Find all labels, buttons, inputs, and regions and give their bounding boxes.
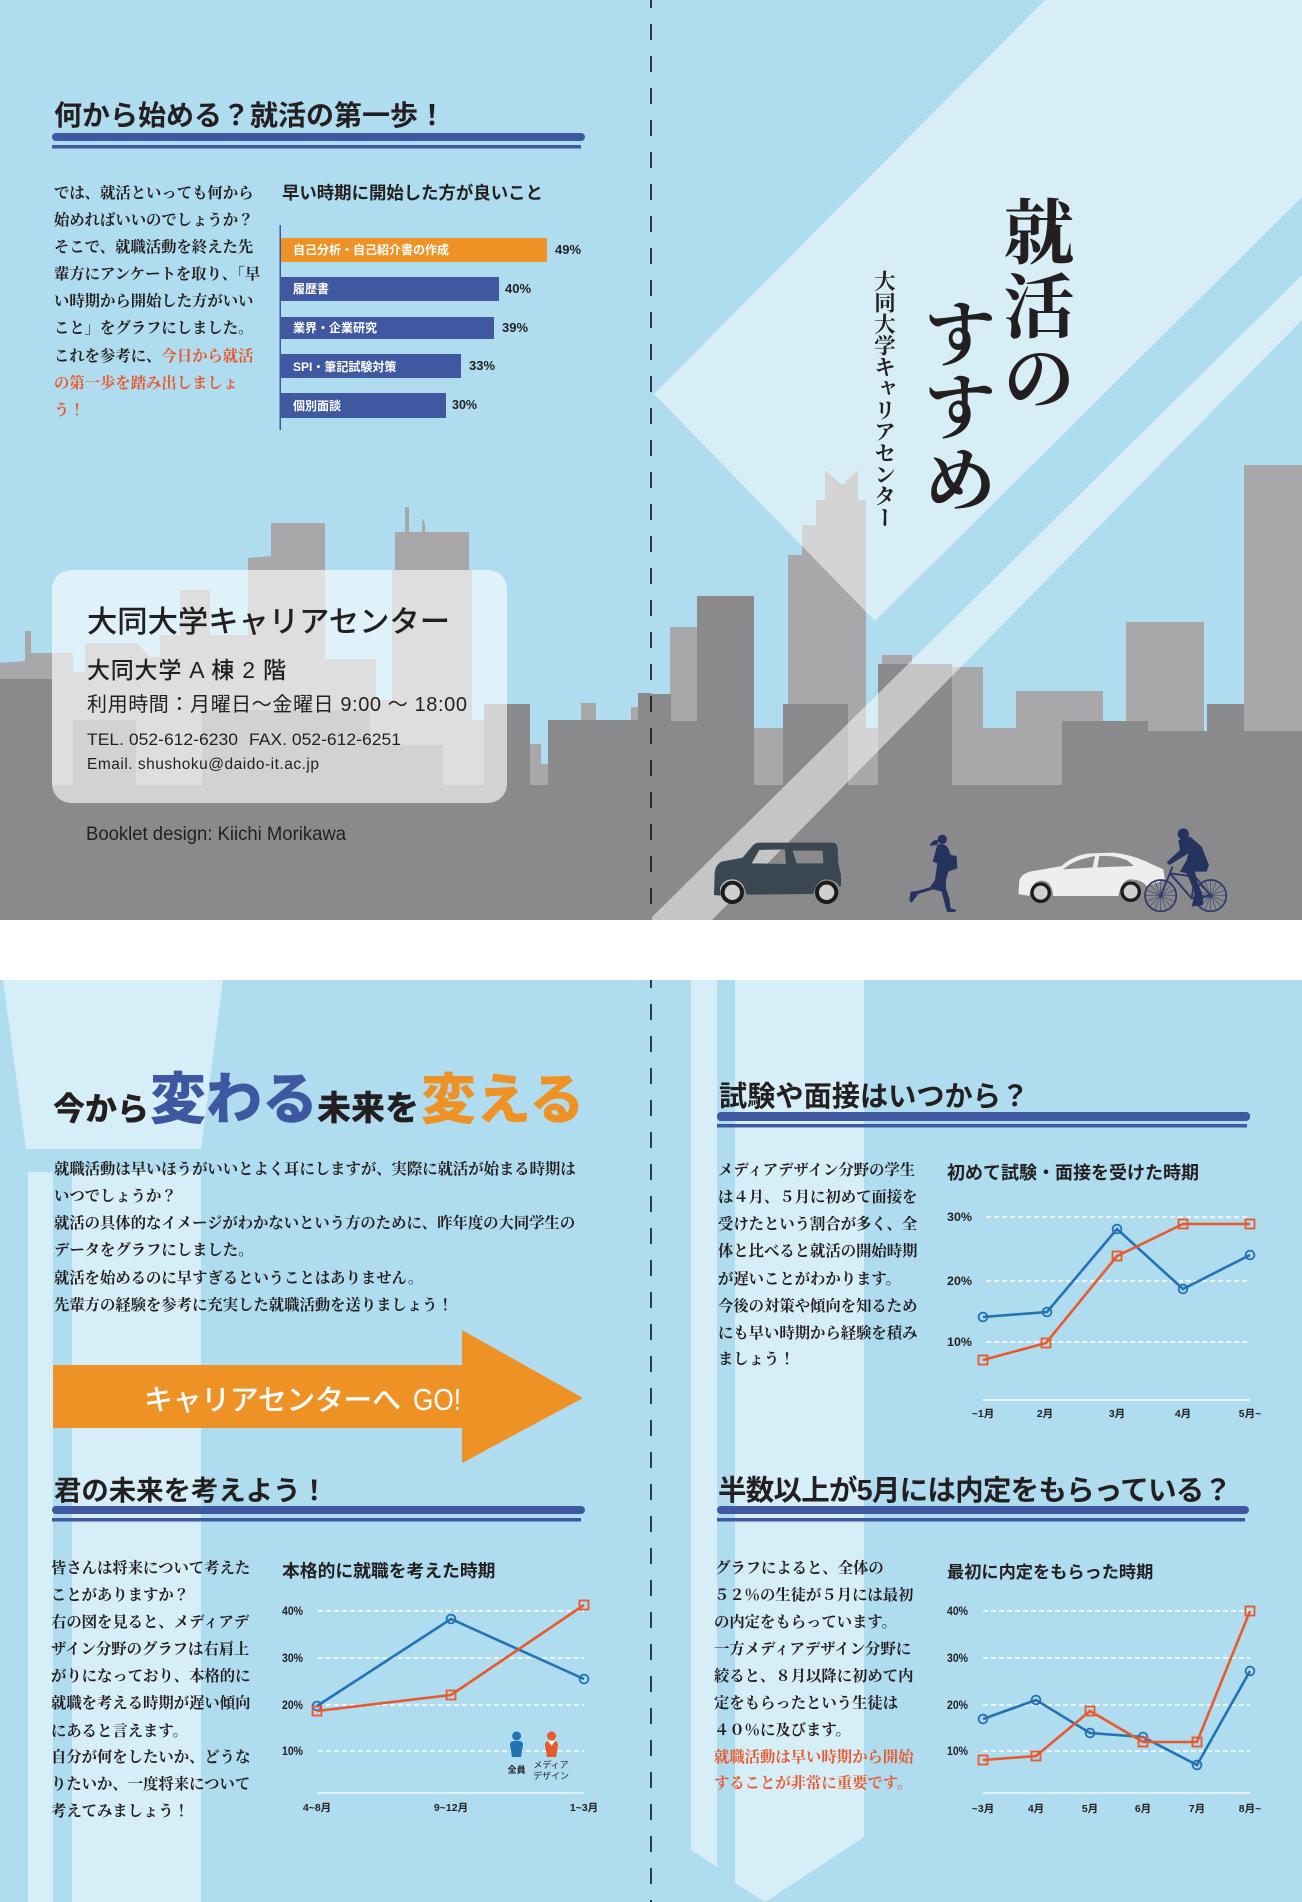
- line chart: first job offer: 8月~: [1239, 1803, 1261, 1815]
- text block: your future: ことがありますか？: [51, 1586, 189, 1604]
- text block: exams and interviews: メディアデザイン分野の学生: [718, 1161, 915, 1179]
- text block: job offers: ５２％の生徒が５月には最初: [714, 1585, 913, 1604]
- bar: SPI 33%: 33%: [469, 358, 495, 373]
- legend: media design: デザイン: [533, 1770, 569, 1781]
- text block: your future: 自分が何をしたいか、どうな: [51, 1747, 250, 1766]
- icon: white car: [1018, 853, 1165, 901]
- series: media design: [978, 1606, 1254, 1764]
- text block: first step intro: [54, 183, 260, 419]
- text block: your future: 就職を考える時期が遅い傾向: [51, 1693, 250, 1712]
- text block: intro: 就職活動は早いほうがいいとよく耳にしますが、実際に就活が始まる時期は: [54, 1159, 576, 1178]
- text block: exams and interviews: 受けたという割合が多く、全: [718, 1214, 918, 1233]
- text block: first step intro: の第一歩を踏み出しましょ: [54, 373, 238, 392]
- text block: exams and interviews: にも早い時期から経験を積み: [718, 1323, 917, 1342]
- cover title: 就: [1003, 177, 1075, 279]
- legend: all students: [508, 1732, 526, 1775]
- fold line: lower spread: [650, 980, 652, 1902]
- line chart: when students began considering jobs: 9~12月: [434, 1802, 468, 1814]
- cover title: 活: [1003, 251, 1075, 353]
- text block: your future: [51, 1558, 250, 1820]
- line chart: first exam or interview: ~1月: [972, 1408, 994, 1420]
- cover title: [924, 177, 1075, 527]
- line chart: first job offer: 6月: [1135, 1803, 1151, 1815]
- text block: your future: 右の図を見ると、メディアデ: [51, 1613, 250, 1631]
- text block: exams and interviews: ましょう！: [718, 1350, 795, 1368]
- cover title: す: [924, 279, 996, 381]
- line chart: when students began considering jobs: 40%: [282, 1606, 303, 1618]
- line chart: first job offer: 4月: [1028, 1803, 1044, 1815]
- text block: first step intro: 輩方にアンケートを取り、「早: [54, 264, 260, 283]
- headline: 変える: [421, 1069, 584, 1131]
- line chart: first exam or interview: 5月~: [1239, 1408, 1261, 1420]
- chart title: 最初に内定をもらった時期: [947, 1562, 1153, 1582]
- text block: intro: いつでしょうか？: [54, 1187, 177, 1205]
- text block: job offers: グラフによると、全体の: [715, 1559, 884, 1577]
- cover title: め: [924, 425, 996, 527]
- text block: first step intro: これを参考に、今日から就活: [54, 346, 253, 365]
- text block: intro: 先輩方の経験を参考に充実した就職活動を送りましょう！: [54, 1295, 453, 1314]
- text block: job offers: 定をもらったという生徒は: [714, 1693, 898, 1712]
- line chart: when students began considering jobs: [282, 1561, 598, 1814]
- line chart: first job offer: 5月: [1082, 1803, 1098, 1815]
- text block: your future: りたいか、一度将来について: [51, 1774, 250, 1793]
- text block: intro: 就活を始めるのに早すぎるということはありません。: [54, 1268, 423, 1287]
- contact: building: 大同大学 A 棟 2 階: [87, 657, 286, 683]
- heading: exams and interviews: [717, 1080, 1250, 1128]
- arrow: to career center: [53, 1330, 583, 1463]
- legend: all students: 全員: [508, 1764, 526, 1775]
- text block: job offers: [714, 1559, 915, 1792]
- heading: your future: [52, 1475, 585, 1522]
- text block: exams and interviews: 体と比べると就活の開始時期: [718, 1241, 917, 1260]
- cover title: す: [924, 352, 996, 454]
- bar: resume 40%: 履歴書: [293, 281, 329, 296]
- line chart: first job offer: 7月: [1189, 1803, 1205, 1815]
- line chart: first job offer: 30%: [947, 1653, 968, 1665]
- line chart: first exam or interview: 4月: [1175, 1408, 1191, 1420]
- bar: interview 30%: [281, 393, 477, 418]
- line chart: first exam or interview: 2月: [1037, 1408, 1053, 1420]
- line chart: first job offer: ~3月: [972, 1803, 994, 1815]
- line chart: when students began considering jobs: 20%: [282, 1700, 303, 1712]
- contact: hours: 利用時間：月曜日～金曜日 9:00 ～ 18:00: [87, 693, 467, 716]
- line chart: first exam or interview: 3月: [1109, 1408, 1125, 1420]
- line chart: when students began considering jobs: 1~3月: [570, 1802, 598, 1814]
- light beam: diagonal band: [652, 275, 1302, 920]
- cover title: の: [1003, 323, 1075, 425]
- heading: first step: 何から始める？就活の第一歩！: [54, 100, 446, 131]
- icon: dark car: [714, 843, 841, 902]
- line chart: first exam or interview: 30%: [947, 1212, 972, 1224]
- decoration: lower-right chevron strips: [691, 980, 864, 1902]
- bar: industry research 39%: [281, 317, 528, 339]
- arrow: to career center: キャリアセンターへ: [144, 1385, 401, 1417]
- bar: industry research 39%: 業界・企業研究: [293, 320, 377, 335]
- text block: job offers: 絞ると、８月以降に初めて内: [714, 1666, 913, 1685]
- icon: cyclist: [1145, 828, 1226, 911]
- series: all students: [979, 1667, 1254, 1769]
- text block: first step intro: そこで、就職活動を終えた先: [54, 237, 253, 256]
- bar: resume 40%: [281, 277, 531, 301]
- bar: self analysis 49%: 49%: [555, 242, 581, 257]
- text block: exams and interviews: 今後の対策や傾向を知るため: [718, 1296, 917, 1315]
- headline: 未来を: [317, 1090, 419, 1128]
- text block: first step intro: では、就活といっても何から: [54, 183, 253, 202]
- text block: first step intro: 始めればいいのでしょうか？: [54, 211, 253, 229]
- text block: job offers: の内定をもらっています。: [714, 1612, 897, 1631]
- text block: intro: [54, 1159, 576, 1314]
- text block: your future: 考えてみましょう！: [51, 1801, 189, 1820]
- contact: phone and fax: [87, 730, 401, 749]
- text block: first step intro: い時期から開始した方がいい: [54, 291, 253, 310]
- legend: media design: メディア: [533, 1759, 569, 1770]
- legend: media design: [533, 1732, 569, 1781]
- fold line: upper spread: [650, 0, 652, 920]
- text block: your future: ザイン分野のグラフは右肩上: [51, 1639, 249, 1658]
- headline: 変わる: [150, 1068, 318, 1131]
- line chart: first exam or interview: 20%: [947, 1276, 972, 1288]
- text block: job offers: ４０％に及びます。: [714, 1721, 851, 1739]
- text block: exams and interviews: [718, 1161, 918, 1368]
- chart title: 初めて試験・面接を受けた時期: [947, 1162, 1199, 1183]
- bar: interview 30%: 30%: [452, 397, 477, 412]
- bar: self analysis 49%: 自己分析・自己紹介書の作成: [293, 242, 449, 257]
- chart title: 早い時期に開始した方が良いこと: [282, 183, 543, 203]
- text block: your future: にあると言えます。: [51, 1722, 188, 1740]
- line chart: when students began considering jobs: 4~8月: [303, 1802, 331, 1814]
- text block: intro: 就活の具体的なイメージがわかないという方のために、昨年度の大同学生の: [54, 1213, 575, 1232]
- line chart: first exam or interview: 10%: [947, 1337, 972, 1349]
- panel: back cover skyline: [0, 507, 651, 920]
- design credit: Booklet design: Kiichi Morikawa: [86, 824, 346, 845]
- decoration: lower-left light shapes: [3, 980, 223, 1902]
- text block: first step intro: こと」をグラフにしました。: [54, 319, 253, 337]
- heading: your future: 君の未来を考えよう！: [54, 1475, 328, 1506]
- panel: contact card: [52, 570, 507, 803]
- contact: email: Email. shushoku@daido-it.ac.jp: [87, 756, 319, 773]
- contact: centre name: 大同大学キャリアセンター: [87, 605, 450, 639]
- line chart: first job offer: 10%: [947, 1746, 968, 1758]
- text block: intro: データをグラフにしました。: [54, 1241, 253, 1259]
- cover subtitle: publisher: 大同大学キャリアセンター: [870, 270, 900, 528]
- series: all students: [979, 1225, 1254, 1321]
- series: media design: [312, 1600, 588, 1716]
- lower spread background: [0, 980, 1302, 1902]
- contact: phone and fax: TEL. 052-612-6230: [87, 730, 238, 749]
- series: media design: [978, 1220, 1254, 1364]
- bar: self analysis 49%: [281, 238, 581, 262]
- text block: your future: 皆さんは将来について考えた: [51, 1558, 250, 1577]
- arrow: to career center: GO!: [413, 1382, 461, 1417]
- heading: job offers by May: 半数以上が5月には内定をもらっている？: [718, 1474, 1232, 1507]
- heading: first step: [52, 100, 585, 148]
- light beam: large diamond: [654, 0, 1302, 621]
- heading: job offers by May: [717, 1474, 1249, 1522]
- text block: your future: がりになっており、本格的に: [51, 1666, 250, 1685]
- bar: interview 30%: 個別面談: [293, 398, 341, 413]
- bar chart: what to start early: [280, 183, 581, 430]
- contact: phone and fax: FAX. 052-612-6251: [249, 730, 401, 749]
- text block: exams and interviews: は４月、５月に初めて面接を: [718, 1187, 917, 1206]
- text block: job offers: 就職活動は早い時期から開始: [714, 1747, 915, 1766]
- heading: exams and interviews: 試験や面接はいつから？: [719, 1080, 1029, 1112]
- upper spread background: [0, 0, 1302, 920]
- line chart: when students began considering jobs: 30%: [282, 1653, 303, 1665]
- chart title: 本格的に就職を考えた時期: [282, 1561, 495, 1581]
- text block: first step intro: う！: [54, 401, 85, 419]
- series: all students: [313, 1615, 588, 1710]
- bar: resume 40%: 40%: [505, 281, 531, 296]
- headline: 今から: [53, 1091, 149, 1127]
- line chart: first job offer: 40%: [947, 1606, 968, 1618]
- icon: running woman: [909, 835, 957, 912]
- bar: SPI 33%: [281, 354, 495, 378]
- text block: exams and interviews: が遅いことがわかります。: [718, 1270, 901, 1288]
- text block: job offers: することが非常に重要です。: [714, 1773, 912, 1792]
- line chart: first job offer: [947, 1562, 1261, 1815]
- text block: job offers: 一方メディアデザイン分野に: [714, 1639, 911, 1658]
- line chart: first job offer: 20%: [947, 1700, 968, 1712]
- bar: industry research 39%: 39%: [502, 320, 528, 335]
- headline: [53, 1068, 584, 1131]
- panel: front cover skyline: [651, 465, 1302, 920]
- line chart: first exam or interview: [947, 1162, 1261, 1420]
- line chart: when students began considering jobs: 10%: [282, 1746, 303, 1758]
- bar: SPI 33%: SPI・筆記試験対策: [293, 359, 396, 374]
